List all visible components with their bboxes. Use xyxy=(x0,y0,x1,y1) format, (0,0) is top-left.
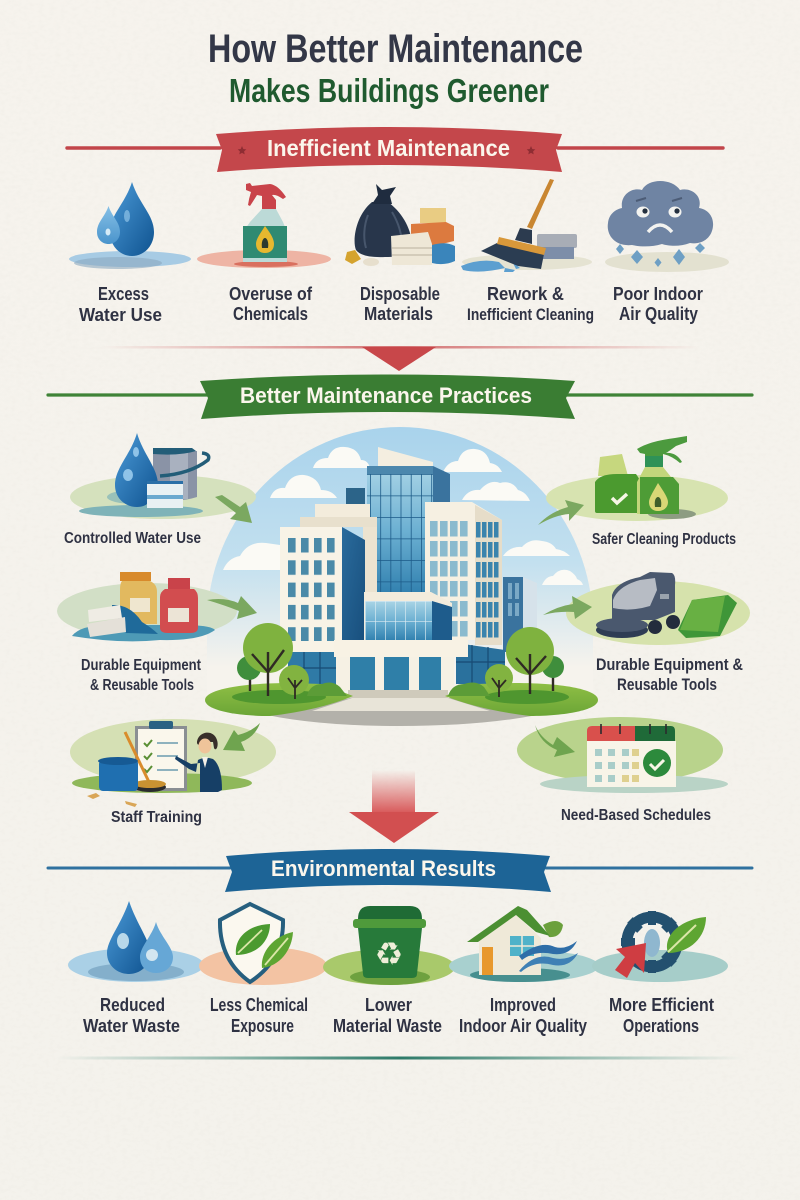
left building xyxy=(315,504,370,517)
icon: excess water xyxy=(69,182,191,269)
practice: controlled water use xyxy=(64,433,256,547)
illustration: green building xyxy=(205,427,598,726)
labels: inefficient maintenance row: Rework & xyxy=(487,284,564,304)
right building xyxy=(425,502,502,640)
back block xyxy=(503,577,523,652)
practice: durable equipment right xyxy=(543,572,750,694)
section heading: Environmental Results: Environmental Results xyxy=(271,856,496,881)
title: How Better Maintenance xyxy=(208,27,583,71)
labels: inefficient maintenance row: Materials xyxy=(364,304,433,324)
icon: reduced water waste xyxy=(68,901,204,982)
labels: inefficient maintenance row: Inefficient Cleaning xyxy=(467,305,594,324)
practice: need-based schedules xyxy=(517,717,728,824)
icon: more efficient operations xyxy=(592,911,728,982)
road xyxy=(267,698,537,726)
title xyxy=(208,27,583,109)
labels: environmental results row: Less Chemical xyxy=(210,995,308,1015)
practice: safer cleaning products: Safer Cleaning Products xyxy=(592,531,736,548)
practice: durable equipment left: & Reusable Tools xyxy=(90,677,194,694)
labels: environmental results row: Water Waste xyxy=(83,1016,180,1036)
entrance xyxy=(336,655,454,691)
practice: need-based schedules: Need-Based Schedules xyxy=(561,807,711,824)
labels: inefficient maintenance row: Chemicals xyxy=(233,304,308,324)
sky dome xyxy=(207,427,593,700)
trees xyxy=(250,668,553,691)
icon: lower material waste xyxy=(323,906,455,985)
clouds xyxy=(223,447,583,585)
labels: environmental results row: Improved xyxy=(490,995,556,1015)
section heading: Inefficient Maintenance xyxy=(67,127,723,172)
practice: staff training xyxy=(70,719,276,826)
labels: environmental results row: Lower xyxy=(365,995,412,1015)
lower glass xyxy=(288,652,336,688)
practice: durable equipment right: Durable Equipment & xyxy=(596,655,743,674)
title: Makes Buildings Greener xyxy=(229,72,549,109)
icon: less chemical exposure xyxy=(199,904,327,985)
practice: safer cleaning products xyxy=(538,436,736,548)
labels: environmental results row xyxy=(83,995,714,1036)
labels: environmental results row: Reduced xyxy=(100,995,165,1015)
labels: environmental results row: Operations xyxy=(623,1016,699,1036)
icon: lower material waste: ♻ xyxy=(375,935,403,973)
arrow: section one to section two xyxy=(100,346,700,371)
lawns xyxy=(205,683,353,716)
icon: improved indoor air quality xyxy=(449,906,599,982)
section heading: Inefficient Maintenance: Inefficient Maintenance xyxy=(267,135,510,161)
practice: durable equipment left: Durable Equipment xyxy=(81,657,202,674)
icon: poor air quality cloud xyxy=(605,181,729,272)
labels: inefficient maintenance row: Air Quality xyxy=(619,304,698,324)
icon: disposable materials xyxy=(345,184,455,266)
practice: controlled water use: Controlled Water Use xyxy=(64,530,201,547)
labels: environmental results row: More Efficient xyxy=(609,995,714,1015)
labels: environmental results row: Exposure xyxy=(231,1016,294,1036)
practice: durable equipment left xyxy=(57,572,257,694)
arrow: practices to results xyxy=(349,770,439,843)
labels: inefficient maintenance row: Overuse of xyxy=(229,284,313,304)
central tower xyxy=(378,447,433,466)
labels: inefficient maintenance row: Poor Indoor xyxy=(613,284,703,304)
section heading: Environmental Results xyxy=(48,849,752,892)
section heading: Better Maintenance Practices: Better Maintenance Practices xyxy=(240,383,532,408)
icon: chemical spray bottle xyxy=(197,183,331,268)
labels: inefficient maintenance row: Water Use xyxy=(79,305,162,325)
labels: environmental results row: Material Waste xyxy=(333,1016,442,1036)
labels: inefficient maintenance row: Excess xyxy=(98,284,149,304)
practice: durable equipment right: Reusable Tools xyxy=(617,675,717,694)
podium glass xyxy=(364,592,452,640)
labels: inefficient maintenance row xyxy=(79,284,703,325)
section heading: Better Maintenance Practices xyxy=(48,374,752,419)
labels: environmental results row: Indoor Air Quality xyxy=(459,1016,587,1036)
labels: inefficient maintenance row: Disposable xyxy=(360,284,440,304)
icon: broom and rework xyxy=(461,179,592,272)
practice: staff training: Staff Training xyxy=(111,809,202,826)
